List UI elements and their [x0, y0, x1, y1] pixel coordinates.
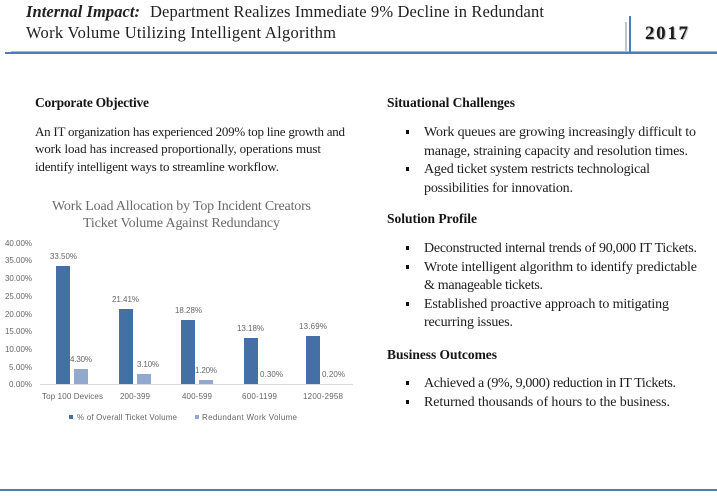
heading: business outcomes: Business Outcomes	[387, 347, 497, 362]
category labels: Top 100 Devices	[42, 392, 103, 401]
y axis labels: 10.00%	[5, 345, 32, 354]
heading: solution profile: Solution Profile	[387, 211, 477, 226]
data labels: 13.69%	[299, 322, 327, 331]
data labels: 0.20%	[322, 370, 345, 379]
text block: objective	[35, 124, 346, 174]
list: solutions: Wrote intelligent algorithm to identify predictable	[424, 260, 697, 275]
list: outcomes: Returned thousands of hours to the business.	[424, 395, 670, 410]
chart title: Work Load Allocation by Top Incident Creators	[52, 199, 311, 214]
legend	[69, 413, 298, 422]
series: overall ticket volume	[56, 266, 320, 384]
chart title	[52, 199, 311, 231]
list: challenges: Aged ticket system restricts technological	[424, 162, 650, 177]
y axis labels: 40.00%	[5, 239, 32, 248]
legend: % of Overall Ticket Volume	[77, 413, 178, 422]
category labels: 1200-2958	[303, 392, 344, 401]
category labels: 600-1199	[242, 392, 278, 401]
y axis labels: 20.00%	[5, 310, 32, 319]
list: outcomes	[406, 376, 676, 410]
legend: Redundant Work Volume	[202, 413, 298, 422]
data labels: 1.20%	[195, 366, 217, 375]
y axis labels: 25.00%	[5, 292, 32, 301]
data labels: 21.41%	[112, 295, 139, 304]
list: outcomes: Achieved a (9%, 9,000) reduction in IT Tickets.	[424, 376, 676, 391]
list: challenges: manage, straining capacity and resolution times.	[424, 144, 688, 159]
data labels: 33.50%	[50, 252, 77, 261]
axis line	[40, 384, 353, 385]
list: solutions: Established proactive approach to mitigating	[424, 297, 669, 312]
data labels	[50, 252, 345, 379]
year: 2017	[645, 23, 688, 44]
heading: corporate objective: Corporate Objective	[35, 95, 149, 110]
y axis labels: 5.00%	[9, 363, 32, 372]
data labels: 18.28%	[175, 306, 202, 315]
panel: solution profile	[387, 211, 697, 330]
series: redundant work volume	[74, 369, 213, 384]
title	[25, 2, 544, 42]
list: solutions: & manageable tickets.	[424, 278, 543, 293]
text block: objective: work load has increased proportionally, operations must	[35, 141, 321, 156]
list: challenges: Work queues are growing increasingly difficult to	[424, 125, 696, 140]
header rules	[5, 16, 717, 54]
category labels: 400-599	[182, 392, 213, 401]
y axis labels	[5, 239, 32, 389]
list: solutions: recurring issues.	[424, 315, 513, 330]
title: Internal Impact:	[25, 2, 140, 21]
chart title: Ticket Volume Against Redundancy	[83, 216, 280, 231]
y axis labels: 30.00%	[5, 274, 32, 283]
heading: situational challenges: Situational Challenges	[387, 95, 515, 110]
y axis labels: 15.00%	[5, 327, 32, 336]
footer rule	[0, 489, 717, 491]
y axis labels: 35.00%	[5, 256, 32, 265]
panel: business outcomes	[387, 347, 676, 410]
list: solutions	[406, 241, 697, 330]
category labels	[42, 392, 344, 401]
list: solutions: Deconstructed internal trends of 90,000 IT Tickets.	[424, 241, 697, 256]
text block: objective: identify intelligent ways to streamline workflow.	[35, 159, 279, 174]
bar chart: work load allocation	[5, 199, 353, 422]
data labels: 3.10%	[137, 360, 159, 369]
list: challenges	[406, 125, 696, 196]
y axis labels: 0.00%	[9, 380, 32, 389]
data labels: 0.30%	[260, 370, 283, 379]
panel: situational challenges	[387, 95, 696, 196]
list: challenges: possibilities for innovation.	[424, 181, 573, 196]
category labels: 200-399	[120, 392, 151, 401]
panel: corporate objective	[35, 95, 346, 174]
title: Work Volume Utilizing Intelligent Algorithm	[26, 23, 336, 42]
text block: objective: An IT organization has experienced 209% top line growth and	[35, 124, 346, 139]
data labels: 13.18%	[237, 324, 264, 333]
data labels: 4.30%	[70, 355, 92, 364]
title: Department Realizes Immediate 9% Decline in Redundant	[150, 2, 544, 21]
year: 2017	[646, 24, 690, 45]
